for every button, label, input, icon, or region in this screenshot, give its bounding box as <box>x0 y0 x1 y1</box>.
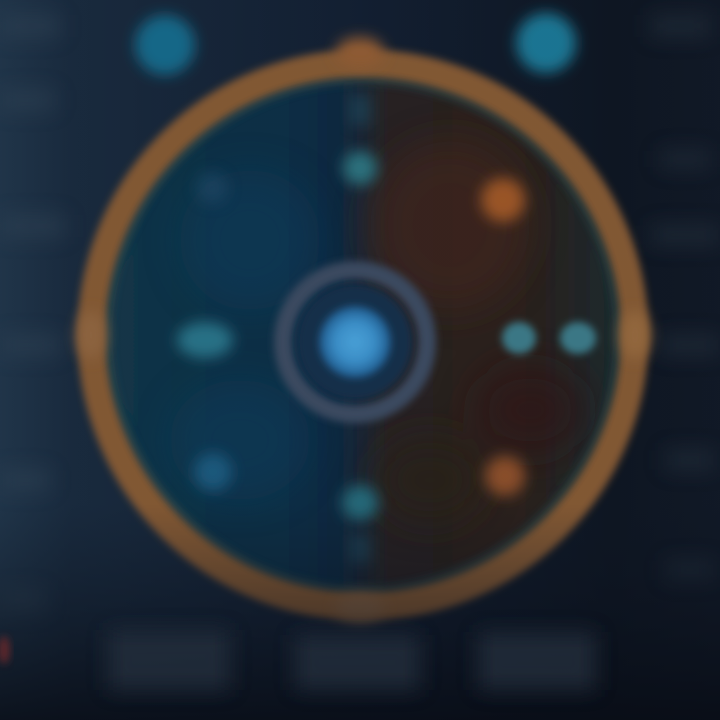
node: upper centre <box>343 151 377 185</box>
bottom panels <box>108 630 596 690</box>
icon: top left circle <box>135 15 195 75</box>
central hub <box>283 270 427 414</box>
left column of faint text bars <box>0 15 65 612</box>
ring node: left <box>77 311 105 359</box>
panel: central disc <box>104 77 620 593</box>
node: lower left blue <box>194 453 232 491</box>
vertical axis marks <box>350 95 370 563</box>
icon: top right circle <box>516 13 576 73</box>
node: right teal pair <box>502 322 596 354</box>
node: lower right orange <box>485 456 525 496</box>
node: upper left faint <box>196 172 228 204</box>
brown right half texture <box>370 140 585 525</box>
ring node: bottom <box>336 594 384 622</box>
blue left half texture <box>170 170 320 500</box>
red accent, lower left <box>0 636 10 664</box>
ring node: right <box>620 311 650 359</box>
orange outer ring <box>77 37 650 622</box>
node: left teal <box>177 322 233 358</box>
node: upper right orange <box>481 178 525 222</box>
ring node: top <box>336 37 384 67</box>
right column of faint text bars <box>650 15 720 580</box>
node: lower centre <box>342 485 378 521</box>
